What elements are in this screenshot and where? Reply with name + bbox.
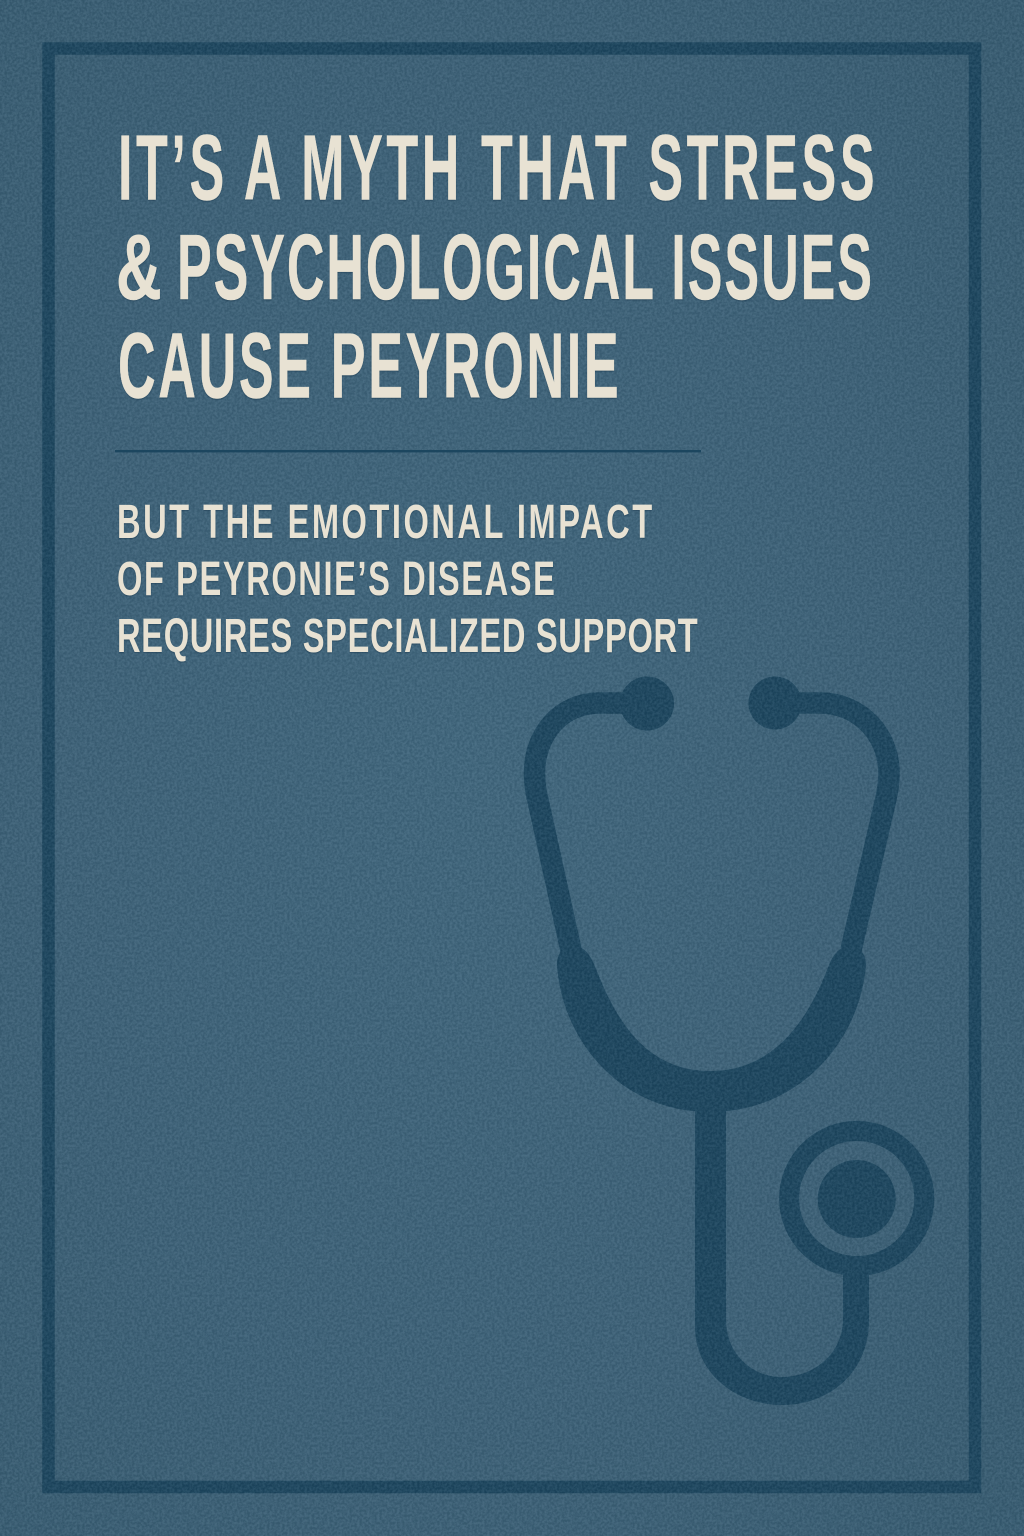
subtitle: BUT THE EMOTIONAL IMPACT <box>117 495 652 549</box>
looping tube <box>695 1105 869 1405</box>
subtitle: OF PEYRONIE’S DISEASE <box>117 552 555 606</box>
chest piece disc <box>818 1160 896 1238</box>
icon: stethoscope <box>534 676 924 1405</box>
title: CAUSE PEYRONIE <box>118 314 619 417</box>
left ear tip <box>620 676 674 730</box>
title: PSYCHOLOGICAL ISSUES <box>177 215 872 319</box>
chest piece ring <box>789 1131 924 1266</box>
thick yoke <box>557 946 866 1112</box>
left ear tube <box>534 703 647 950</box>
subtitle: REQUIRES SPECIALIZED SUPPORT <box>117 609 698 663</box>
title <box>116 116 875 417</box>
title: IT’S A MYTH THAT STRESS <box>118 116 875 219</box>
right ear tube <box>775 703 889 950</box>
title: & <box>116 215 162 319</box>
subtitle <box>117 495 698 663</box>
right ear tip <box>748 676 802 730</box>
